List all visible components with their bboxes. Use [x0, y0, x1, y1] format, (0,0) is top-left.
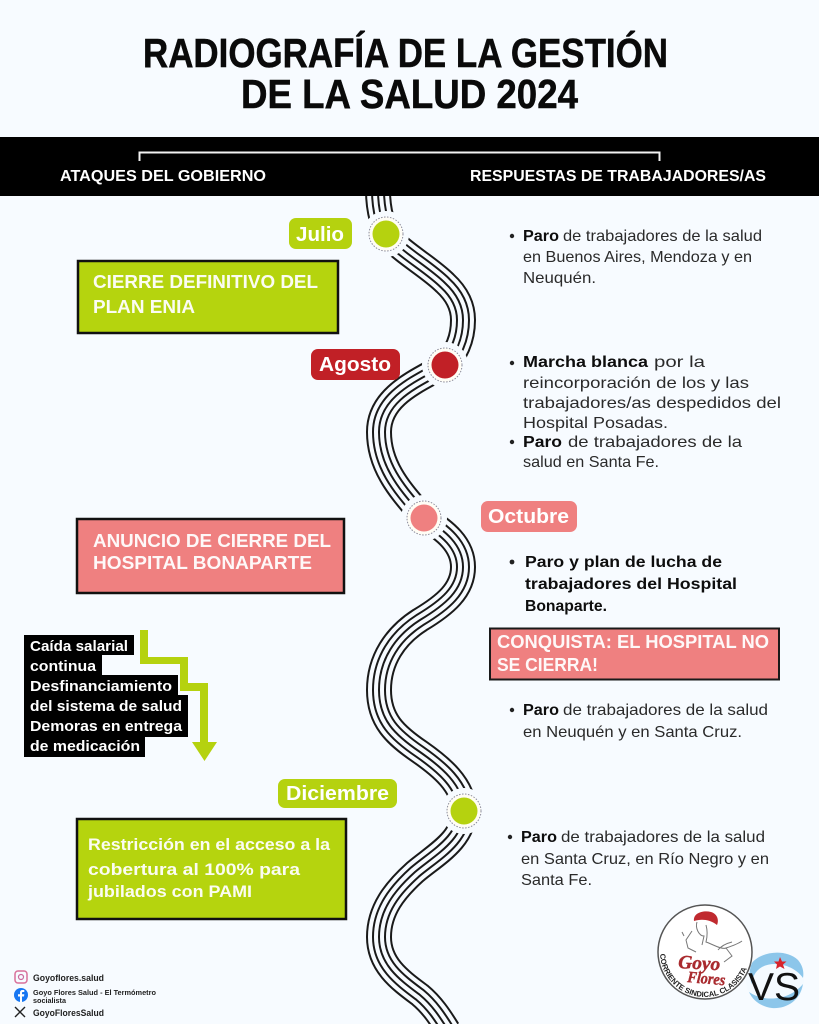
- icon: instagram: [15, 971, 27, 983]
- list: black highlighted text: del sistema de salud: [30, 698, 182, 715]
- node: Julio: [363, 211, 409, 257]
- icon: facebook: [14, 988, 28, 1002]
- text: facebook page: Goyo Flores Salud - El Termómetro: [33, 988, 156, 997]
- box: cierre plan ENIA: CIERRE DEFINITIVO DEL: [93, 272, 318, 292]
- brand name: Goyo: [678, 952, 721, 975]
- text: paro Neuquén y Santa Cruz: [510, 702, 768, 741]
- label: Octubre: [481, 501, 577, 532]
- label: Julio: Julio: [296, 224, 344, 246]
- text: respuestas diciembre: de trabajadores de la salud: [561, 829, 765, 846]
- text: respuestas diciembre: Santa Fe.: [521, 872, 592, 889]
- logo: VS: VS: [748, 966, 800, 1009]
- text: respuestas agosto: Hospital Posadas.: [523, 415, 668, 432]
- label: Octubre: Octubre: [488, 506, 569, 528]
- text: paro Neuquén y Santa Cruz: Paro: [523, 702, 559, 719]
- right column heading: RESPUESTAS DE TRABAJADORES/AS: [470, 168, 766, 185]
- box: restricción PAMI: cobertura al 100% para: [88, 860, 301, 879]
- box: cierre hospital Bonaparte: ANUNCIO DE CIERRE DEL: [93, 531, 331, 551]
- logo: Goyo Flores: [657, 904, 753, 1000]
- icon: X: [15, 1007, 25, 1017]
- list: black highlighted text: continua: [30, 658, 97, 675]
- box: cierre plan ENIA: [78, 261, 338, 333]
- box: cierre hospital Bonaparte: [77, 519, 344, 593]
- text: respuestas agosto: de trabajadores de la: [568, 434, 742, 451]
- text: respuestas diciembre: en Santa Cruz, en Río Negro y en: [521, 851, 769, 868]
- label: Julio: [289, 218, 352, 249]
- text: paro Neuquén y Santa Cruz: en Neuquén y en Santa Cruz.: [523, 724, 742, 741]
- title: DE LA SALUD 2024: [241, 71, 578, 117]
- text: instagram handle: Goyoflores.salud: [33, 973, 104, 983]
- list: black highlighted text: Desfinanciamiento: [30, 678, 172, 695]
- text: respuesta octubre: trabajadores del Hospital: [525, 576, 737, 593]
- list: black highlighted text: [24, 635, 188, 757]
- logo: VS: [746, 951, 804, 1009]
- label: Diciembre: Diciembre: [286, 783, 389, 805]
- label: Diciembre: [278, 779, 397, 808]
- timeline: winding five-line road: [378, 190, 464, 1024]
- text: respuestas julio: [510, 228, 762, 287]
- text: respuestas agosto: reincorporación de los y las: [523, 375, 749, 392]
- header band: [0, 137, 819, 196]
- list: black highlighted text: Caída salarial: [30, 638, 128, 655]
- text: facebook page: [33, 988, 156, 1005]
- text: respuestas agosto: Marcha blanca: [523, 354, 648, 371]
- text: respuestas julio: de trabajadores de la salud: [563, 228, 762, 245]
- circular motto: CORRIENTE SINDICAL CLASISTA: [660, 954, 747, 997]
- box: restricción PAMI: jubilados con PAMI: [87, 882, 252, 901]
- label: Agosto: [311, 349, 400, 380]
- list: black highlighted text: Demoras en entrega: [30, 718, 183, 735]
- text: respuesta octubre: [510, 554, 737, 615]
- box: cierre hospital Bonaparte: HOSPITAL BONAPARTE: [93, 553, 312, 573]
- left column heading: ATAQUES DEL GOBIERNO: [60, 168, 266, 185]
- brand name: [678, 952, 726, 989]
- text: respuestas agosto: por la: [654, 354, 705, 371]
- box: restricción PAMI: [77, 819, 346, 919]
- text: respuestas agosto: trabajadores/as despedidos del: [523, 395, 781, 412]
- label: Agosto: Agosto: [319, 354, 391, 376]
- list: black highlighted text: de medicación: [30, 738, 140, 755]
- box: restricción PAMI: Restricción en el acceso a la: [88, 835, 331, 854]
- callout: conquista: [490, 628, 779, 680]
- figure cap: [694, 911, 718, 925]
- text: paro Neuquén y Santa Cruz: de trabajadores de la salud: [563, 702, 768, 719]
- node: Octubre: [401, 495, 447, 541]
- text: X handle: GoyoFloresSalud: [33, 1008, 104, 1018]
- callout: conquista: SE CIERRA!: [497, 655, 598, 675]
- title: RADIOGRAFÍA DE LA GESTIÓN: [143, 30, 668, 76]
- box: cierre plan ENIA: PLAN ENIA: [93, 297, 195, 317]
- text: respuestas julio: en Buenos Aires, Mendoza y en: [523, 249, 752, 266]
- text: facebook page: socialista: [33, 996, 67, 1005]
- brand name: Flores: [686, 969, 726, 989]
- title: [143, 30, 668, 117]
- node: Diciembre: [441, 788, 487, 834]
- figure outline: [682, 922, 742, 962]
- text: respuestas agosto: Paro: [523, 434, 562, 451]
- text: respuestas diciembre: Paro: [521, 829, 557, 846]
- bracket: [140, 152, 660, 161]
- text: respuestas agosto: salud en Santa Fe.: [523, 454, 659, 471]
- callout: conquista: CONQUISTA: EL HOSPITAL NO: [497, 632, 769, 652]
- text: respuesta octubre: Paro y plan de lucha de: [525, 554, 722, 571]
- social links: [14, 971, 156, 1018]
- text: respuestas agosto: [510, 354, 781, 471]
- arrow: descending green staircase: [140, 630, 217, 761]
- text: respuestas diciembre: [508, 829, 769, 889]
- node: Agosto: [422, 342, 468, 388]
- text: respuesta octubre: Bonaparte.: [525, 598, 607, 615]
- text: respuestas julio: Paro: [523, 228, 559, 245]
- text: respuestas julio: Neuquén.: [523, 270, 596, 287]
